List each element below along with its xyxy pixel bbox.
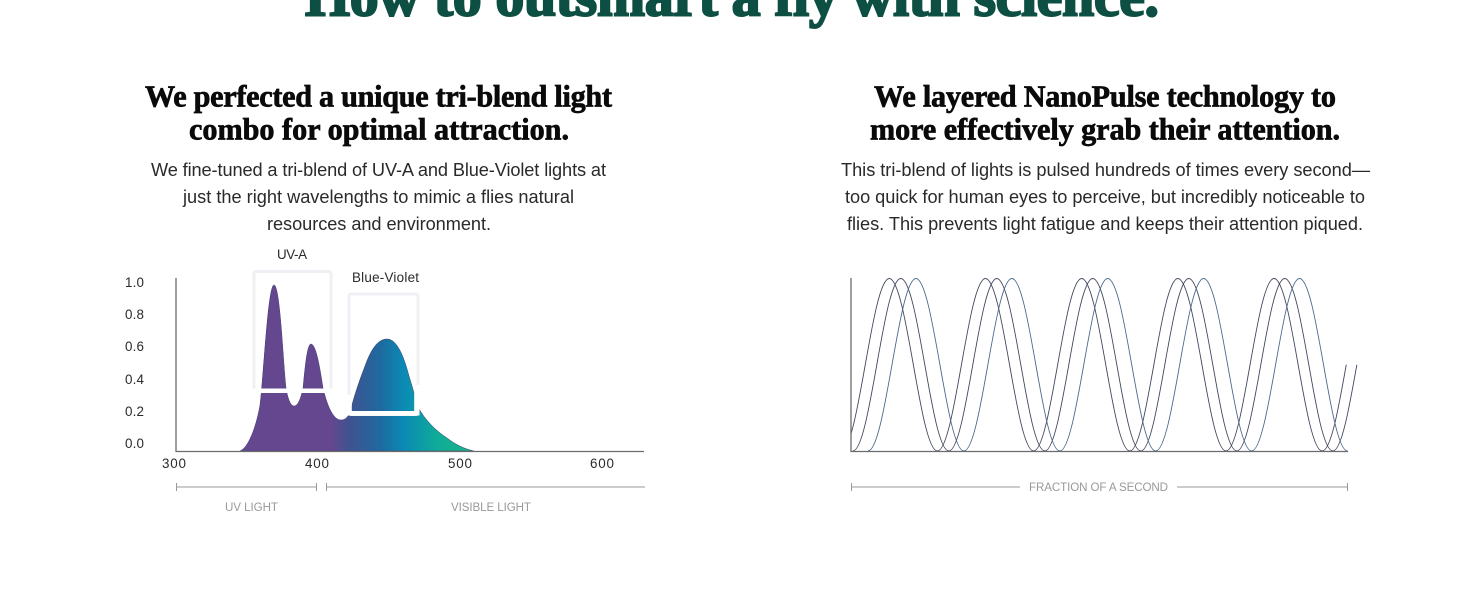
bracket: visible light: VISIBLE LIGHT (451, 501, 531, 514)
heading: NanoPulse: We layered NanoPulse technology to (874, 80, 1336, 114)
text block: NanoPulse description: flies. This prevents light fatigue and keeps their attention piqued. (847, 214, 1363, 234)
heading: tri-blend: We perfected a unique tri-blend light (145, 80, 612, 114)
panel: tri-blend light (125, 80, 645, 514)
heading: tri-blend (145, 80, 612, 146)
spectrum area (240, 285, 474, 451)
blue-violet highlight box (348, 294, 420, 416)
y axis labels: 0.0 (125, 436, 144, 451)
text block: tri-blend description: just the right wavelengths to mimic a flies natural (182, 187, 574, 207)
axes (176, 278, 644, 452)
text block: NanoPulse description: too quick for human eyes to perceive, but incredibly noticeable to (845, 187, 1365, 207)
wave 2 (853, 278, 1357, 451)
y axis labels: 0.4 (125, 372, 145, 387)
bracket: fraction of a second: FRACTION OF A SECOND (1029, 481, 1168, 494)
infographic canvas (126, 0, 1370, 511)
text block: tri-blend description (151, 160, 606, 234)
chart: pulsed light waves (841, 278, 1357, 494)
panel: NanoPulse technology (841, 80, 1371, 494)
bracket: UV light: UV LIGHT (225, 501, 278, 514)
x axis labels: 600 (590, 456, 614, 471)
y axis labels: 1.0 (125, 275, 144, 290)
x axis labels: 400 (305, 456, 329, 471)
text block: tri-blend description: We fine-tuned a tri-blend of UV-A and Blue-Violet lights at (151, 160, 606, 180)
text block: NanoPulse description: This tri-blend of lights is pulsed hundreds of times every second— (841, 160, 1371, 180)
y axis labels (125, 275, 145, 451)
y axis labels: 0.8 (125, 307, 144, 322)
bracket: fraction of a second (852, 481, 1348, 494)
UV-A highlight box (252, 272, 332, 393)
label: Blue-Violet: Blue-Violet (352, 270, 419, 285)
text block: tri-blend description: resources and environment. (267, 214, 491, 234)
label: UV-A: UV-A (277, 247, 307, 262)
y axis labels: 0.6 (125, 339, 144, 354)
y axis labels: 0.2 (125, 404, 144, 419)
chart: light spectrum (125, 247, 645, 514)
heading: tri-blend: combo for optimal attraction. (189, 112, 569, 146)
x axis labels (162, 456, 614, 471)
x axis labels: 300 (162, 456, 186, 471)
wave 1 (841, 278, 1346, 451)
x axis labels: 500 (448, 456, 472, 471)
bracket: UV light (176, 483, 316, 514)
wave 3 (868, 278, 1347, 451)
bracket: visible light (326, 483, 645, 514)
heading: NanoPulse (870, 80, 1340, 146)
text block: NanoPulse description (841, 160, 1371, 234)
heading: NanoPulse: more effectively grab their attention. (870, 112, 1340, 146)
axes (851, 278, 1348, 452)
